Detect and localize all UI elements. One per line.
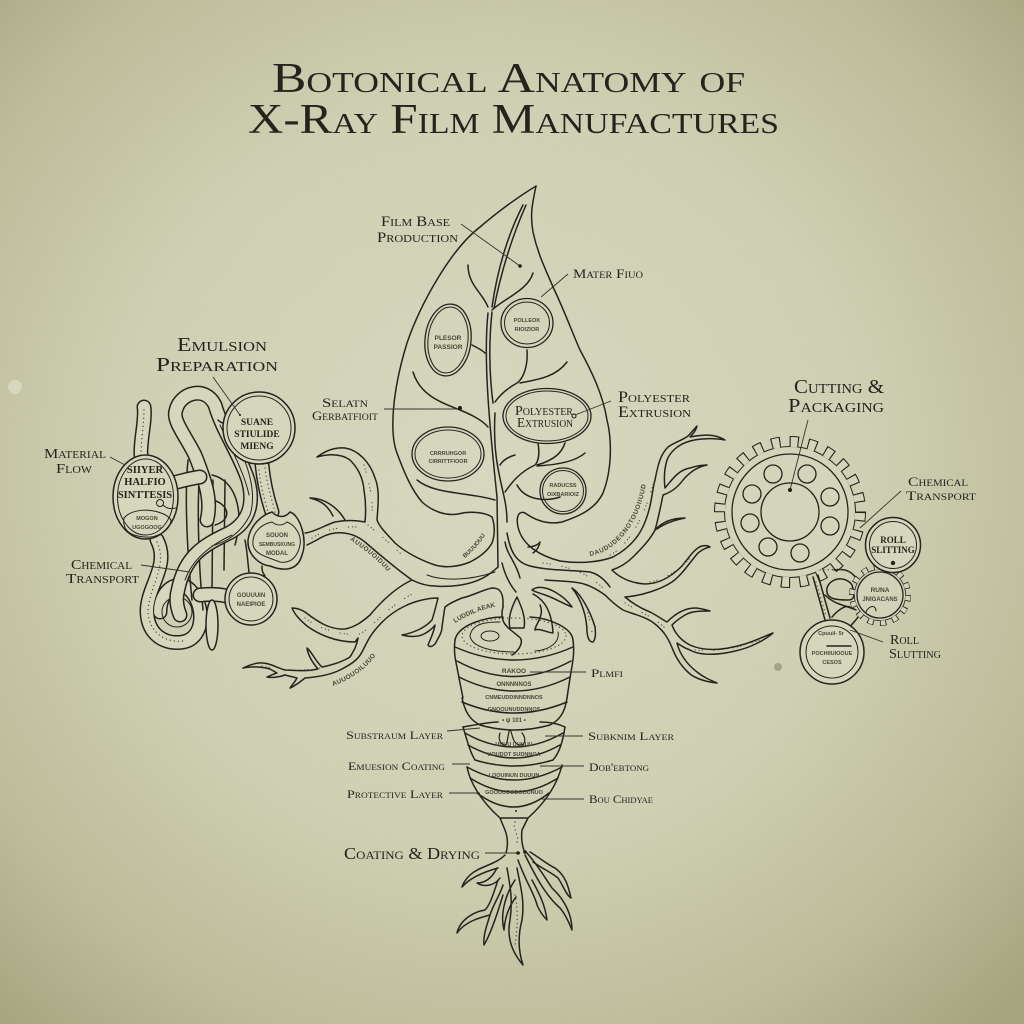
- node: bottom circle: NAEIPIOE: [237, 602, 265, 608]
- bulb band text: RAKOO: [502, 668, 526, 675]
- label: material flow: Flow: [56, 462, 93, 477]
- label: roll slitting: [889, 633, 941, 662]
- bulb band text: [485, 668, 544, 796]
- label: polyester extrusion: Polyester: [618, 389, 691, 406]
- leader dots: [239, 264, 792, 855]
- node: silver halide synthesis: UGOGOOG: [132, 525, 162, 531]
- plant sprout in bulb: [502, 594, 553, 655]
- label: chemical transport left: [66, 558, 139, 587]
- node: bottom circle: [800, 620, 864, 684]
- tube: mixing to solution: [259, 465, 275, 512]
- node: silver halide synthesis: [113, 455, 178, 539]
- label: roll slitting: Roll: [890, 633, 919, 648]
- node: solution: SOUON: [266, 533, 288, 539]
- label: mater fiuo: Mater Fiuo: [573, 266, 644, 281]
- node: solution: MODAL: [266, 551, 288, 557]
- bulb band text: GNOOUNUDDNNOS: [488, 707, 541, 713]
- labels: bulb right: Dob'ebtong: [589, 760, 649, 774]
- title: Botonical Anatomy of: [272, 56, 745, 102]
- node: roll slitting circle: SLITTING: [871, 545, 915, 555]
- oval: raducss: [540, 468, 586, 514]
- oval: pleasor: [421, 302, 475, 378]
- bulb band text: • ψ 101 •: [502, 718, 526, 724]
- node: silver halide synthesis: MOGON: [136, 516, 158, 522]
- label: material flow: Material: [44, 447, 106, 462]
- heading: emulsion preparation: [156, 334, 278, 376]
- labels: bulb right: Bou Chidyae: [589, 792, 653, 806]
- label: gelatin generation: [312, 395, 379, 423]
- node: middle small gear: JNIGACANS: [862, 597, 898, 603]
- tube: vertical back lines: [186, 460, 250, 610]
- node: bottom circle: Cpuuil- 5r: [818, 631, 845, 637]
- node: roll slitting circle: ROLL: [880, 535, 906, 545]
- oval: polleok: [501, 298, 553, 348]
- leaf outline and left root branch: [305, 186, 536, 567]
- heading: coating and drying: Coating & Drying: [344, 844, 480, 863]
- small hatched labels on branches: AUUOUOILUUOUUU: [333, 654, 375, 686]
- bulb band text: LOOUINUN DUUUN: [489, 773, 539, 779]
- small hatched labels on branches: BUUUOUU: [462, 533, 484, 558]
- leader lines: [110, 224, 901, 853]
- node: bottom circle: GOUUUIN: [237, 593, 265, 599]
- bulb band text: ONNNNNOS: [496, 682, 532, 688]
- label: gelatin generation: Gerbatfioit: [312, 408, 379, 423]
- label: film base production: Production: [377, 230, 458, 246]
- node: middle small gear: RUNA: [871, 587, 890, 594]
- labels: bulb left: [346, 728, 445, 801]
- label: chemical transport right: Chemical: [908, 474, 968, 489]
- node: solution: SEMBUSKUNG: [259, 542, 295, 548]
- oval: crrruhgor: CRRRUHGOR: [430, 451, 466, 457]
- tube: loop to mixing: [218, 418, 227, 423]
- title: X-Ray Film Manufactures: [248, 97, 779, 143]
- oval: polyester extrusion: Polyester: [515, 404, 573, 419]
- gear connector tubes: [813, 569, 858, 628]
- node: silver halide synthesis: SINTTESIS: [118, 490, 172, 501]
- leaf veins: [413, 205, 585, 567]
- labels: bulb right: [588, 666, 675, 806]
- label: film base production: [377, 214, 458, 246]
- node: bottom circle: POCHIIUIOOUE: [812, 651, 853, 657]
- tube: big loop and s-band: [175, 393, 253, 615]
- label: roll slitting: Slutting: [889, 647, 941, 662]
- labels: bulb right: Subknim Layer: [588, 729, 675, 743]
- label: polyester extrusion: [618, 389, 691, 421]
- bulb band text: UUUU UUUUU: [495, 742, 533, 748]
- small hatched labels on branches: [333, 484, 646, 686]
- layered bulb: [454, 617, 574, 853]
- root branches right: [502, 455, 773, 683]
- tube: pill: [200, 594, 226, 650]
- bulb band text: CNMEUDDINNDNNOS: [485, 695, 543, 701]
- tube: connector: [177, 477, 200, 482]
- bottom roots: [457, 822, 572, 965]
- small hatched labels on branches: LUDDIL AEAK: [453, 602, 496, 623]
- bulb band text: UOUDOT SUDNNOA: [487, 752, 541, 758]
- labels: bulb right: Plmfi: [591, 666, 623, 680]
- oval: crrruhgor: CIRRITTFIOOR: [428, 459, 468, 465]
- labels: bulb left: Substraum Layer: [346, 728, 444, 742]
- node: bottom circle: CESOS: [822, 660, 842, 666]
- oval: raducss: OIXBARIOIZ: [547, 492, 580, 498]
- small hatched labels on branches: DAUDUDEGNOTOUOIIUUDEOIODU: [590, 484, 646, 556]
- heading: cutting and packaging: Packaging: [788, 395, 884, 417]
- node: silver halide synthesis: SIIYER: [127, 465, 164, 476]
- root branches left: [243, 465, 503, 688]
- oval: raducss: RADUCSS: [549, 483, 577, 489]
- emulsion preparation tubes: [141, 393, 275, 650]
- node: roll slitting circle: [866, 518, 920, 572]
- heading: emulsion preparation: Emulsion: [177, 334, 267, 356]
- node: solution: [248, 512, 304, 569]
- oval: polyester extrusion: [503, 388, 591, 444]
- node: bottom circle: [225, 566, 277, 625]
- label: gelatin generation: Selatn: [322, 395, 369, 410]
- bulb band text: GOOUUOODODUNUO: [485, 790, 544, 796]
- label: chemical transport left: Chemical: [71, 558, 132, 573]
- bulb rim and inner rings: [454, 617, 574, 853]
- tube: lower coil: [147, 540, 200, 643]
- oval: pleasor: PLESOR: [435, 335, 462, 342]
- node: silver halide synthesis: HALFIO: [124, 477, 166, 488]
- node: mixing: STIULIDE: [234, 430, 280, 440]
- title: [248, 56, 779, 143]
- node: mixing: MIENG: [240, 442, 274, 452]
- tube: top bulb stem: [141, 407, 144, 455]
- oval: polleok: RIOIZIOR: [515, 327, 539, 333]
- small hatched labels on branches: AUUOUOIDUUOS: [350, 537, 391, 570]
- heading: emulsion preparation: Preparation: [156, 354, 278, 376]
- oval: polleok: POLLEOK: [514, 318, 540, 324]
- label: chemical transport right: [906, 474, 977, 503]
- node: mixing: [223, 392, 295, 464]
- leaf with veins: [305, 186, 725, 567]
- oval: pleasor: PASSIOR: [434, 344, 463, 351]
- oval: polyester extrusion: Extrusion: [517, 416, 573, 431]
- oval: crrruhgor: [412, 427, 484, 481]
- heading: cutting and packaging: [788, 376, 884, 417]
- label: film base production: Film Base: [381, 214, 450, 230]
- label: material flow: [44, 447, 106, 477]
- node: mixing: SUANE: [241, 418, 273, 428]
- labels: bulb left: Emuesion Coating: [348, 759, 445, 773]
- label: polyester extrusion: Extrusion: [618, 404, 691, 421]
- gear: cutting and packaging: [719, 441, 861, 583]
- leaf outline right and right root branch: [517, 186, 725, 562]
- labels: bulb left: Protective Layer: [347, 787, 444, 801]
- node: middle small gear: [852, 566, 908, 624]
- label: chemical transport right: Transport: [906, 488, 977, 503]
- heading: cutting and packaging: Cutting &: [794, 376, 884, 398]
- label: chemical transport left: Transport: [66, 572, 139, 587]
